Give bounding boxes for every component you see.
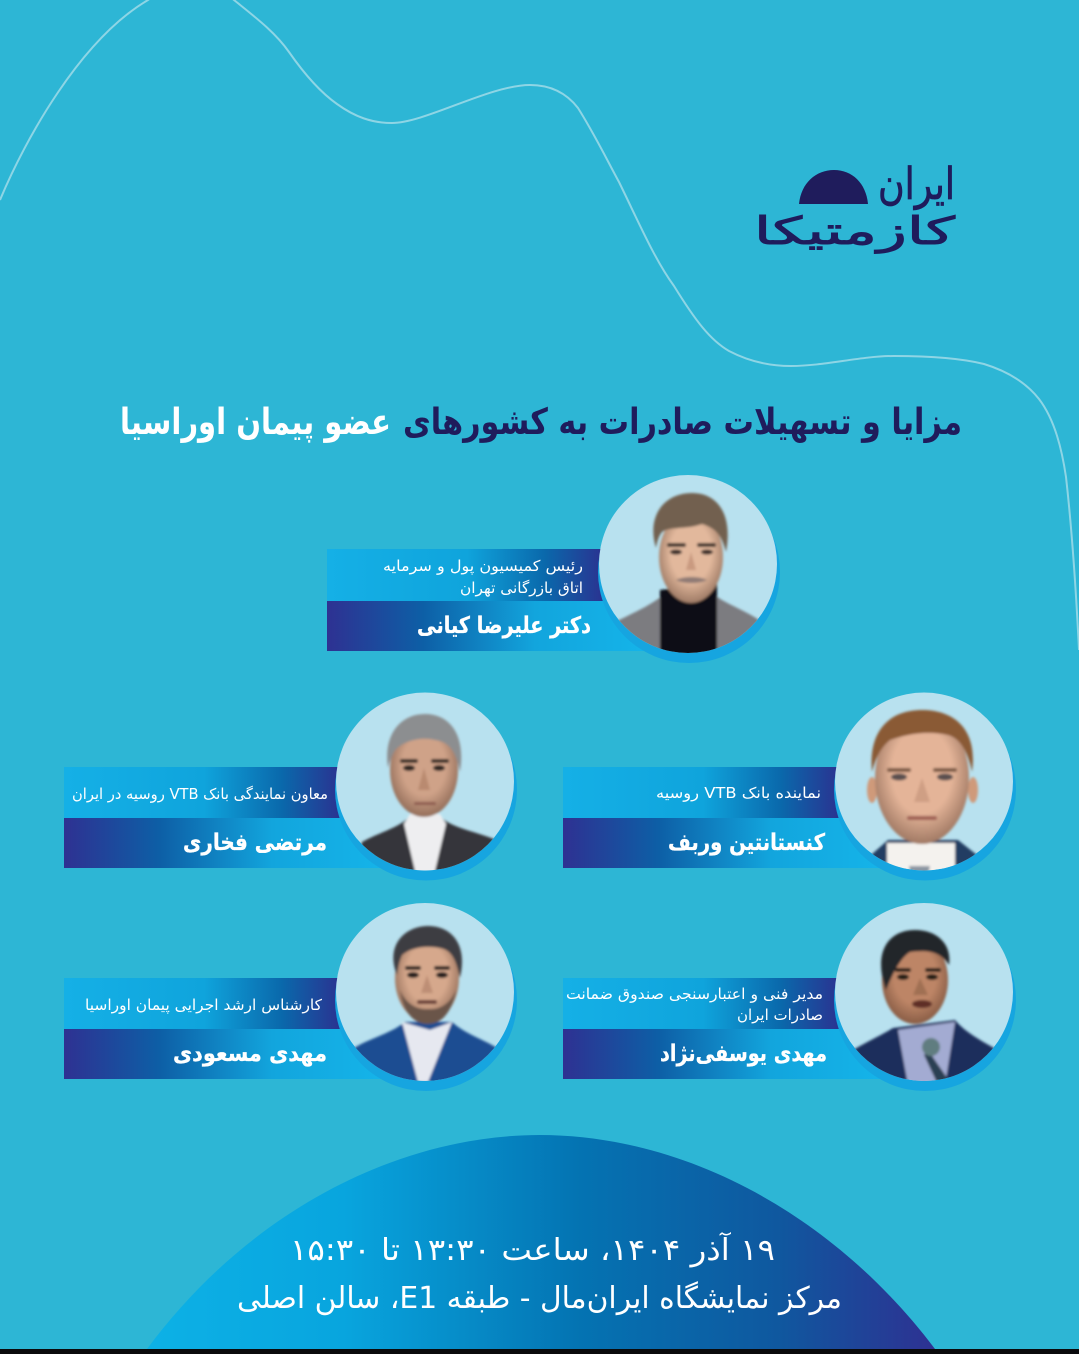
title navy part: مزایا و تسهیلات صادرات به کشورهای — [403, 402, 962, 443]
photo crescent — [834, 909, 1016, 1091]
bottom dome — [147, 1135, 935, 1349]
role band — [563, 978, 843, 1029]
bottom black strip — [0, 1349, 1079, 1354]
logo — [754, 159, 956, 253]
name band — [327, 601, 647, 651]
role text: کارشناس ارشد اجرایی پیمان اوراسیا — [85, 996, 323, 1015]
logo word: کازمتیکا: کازمتیکا — [754, 209, 956, 253]
photo — [835, 903, 1013, 1085]
event date and time: ۱۹ آذر ۱۴۰۴، ساعت ۱۳:۳۰ تا ۱۵:۳۰ — [290, 1232, 775, 1268]
role band — [327, 549, 607, 601]
name text: مهدی یوسفی‌نژاد — [660, 1041, 827, 1067]
name band — [563, 1029, 883, 1079]
role text: رئیس کمیسیون پول و سرمایه — [383, 557, 583, 576]
role text: نماینده بانک VTB روسیه — [656, 784, 821, 802]
name band — [563, 818, 883, 868]
name text: کنستانتین وربف — [668, 830, 826, 856]
logo dome — [799, 170, 868, 204]
name text: دکتر علیرضا کیانی — [417, 613, 591, 639]
speaker card: مهدی مسعودی — [64, 903, 517, 1091]
role text: مدیر فنی و اعتبارسنجی صندوق ضمانت — [566, 985, 823, 1003]
title white part: عضو پیمان اوراسیا — [120, 402, 391, 443]
photo — [336, 692, 514, 875]
role band — [563, 767, 843, 818]
speaker card: کنستانتین وربف — [563, 692, 1016, 880]
photo — [336, 903, 514, 1085]
photo — [835, 692, 1013, 875]
speaker card: مرتضی فخاری — [64, 692, 517, 880]
photo crescent — [335, 698, 517, 880]
name band — [64, 818, 384, 868]
speaker card: علیرضا کیانی — [327, 475, 780, 663]
photo — [599, 475, 777, 660]
role text: معاون نمایندگی بانک VTB روسیه در ایران — [72, 785, 328, 803]
speaker card: مهدی یوسفی‌نژاد — [563, 903, 1016, 1091]
photo crescent — [598, 481, 780, 663]
photo crescent — [834, 698, 1016, 880]
speaker card: مهدی یوسفی‌نژاد: صادرات ایران — [737, 1006, 823, 1024]
name text: مهدی مسعودی — [173, 1041, 327, 1067]
logo word: ایران: ایران — [878, 159, 955, 210]
name band — [64, 1029, 384, 1079]
speaker card: علیرضا کیانی: اتاق بازرگانی تهران — [460, 579, 583, 597]
name text: مرتضی فخاری — [183, 830, 327, 856]
event venue: مرکز نمایشگاه ایران‌مال - طبقه E1، سالن اصلی — [237, 1281, 842, 1316]
role band — [64, 767, 344, 818]
role band — [64, 978, 344, 1029]
decorative curved line — [0, 0, 1079, 650]
title — [120, 402, 962, 443]
photo crescent — [335, 909, 517, 1091]
